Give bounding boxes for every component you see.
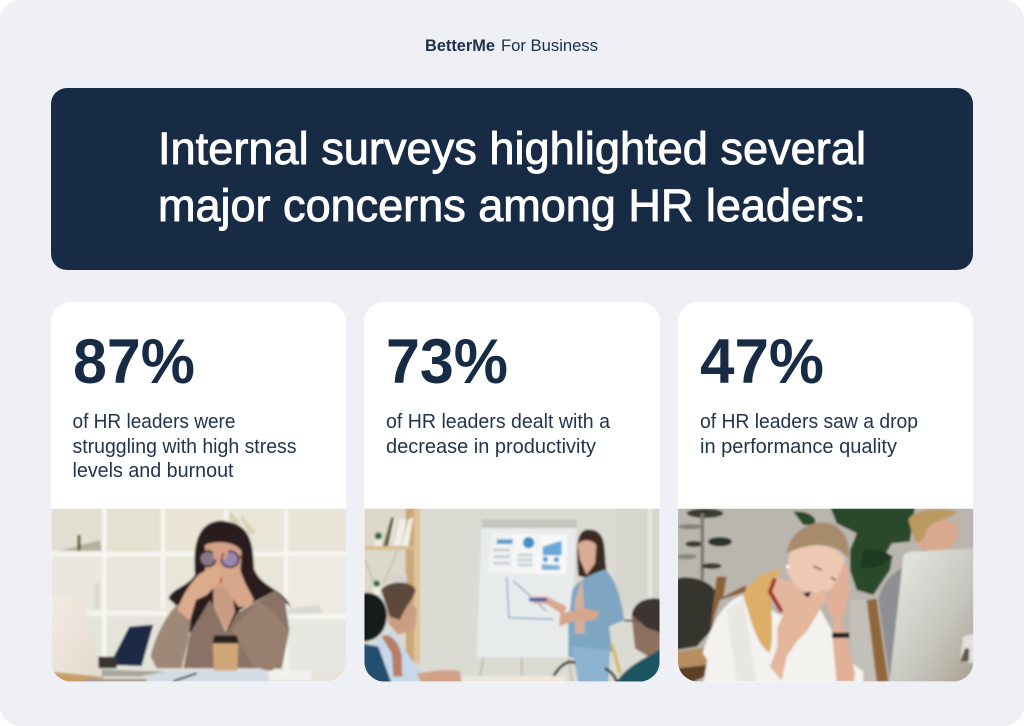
hair [168, 521, 291, 637]
hair top [787, 522, 849, 558]
wooden shelf [406, 507, 414, 664]
stat: 47%: 47% [700, 327, 824, 397]
man behind [878, 568, 902, 678]
logo: BetterMe For Business: For Business [501, 36, 598, 55]
monitor [889, 548, 975, 683]
chair [109, 625, 153, 666]
neck and shirt [213, 588, 235, 632]
ponytail [743, 569, 782, 653]
stat: 87%: 87% [73, 327, 195, 397]
logo: BetterMe For Business: BetterMe [425, 36, 495, 55]
logo: BetterMe For Business [425, 36, 598, 55]
books [98, 657, 117, 668]
chart papers [490, 534, 512, 572]
table [462, 676, 514, 682]
title: major concerns among HR leaders: [158, 180, 866, 231]
yawning hand and forearm [770, 588, 827, 681]
desk [51, 672, 348, 683]
face [787, 545, 844, 593]
panel: 87% stress and burnout [51, 302, 348, 684]
stat: 73%: 73% [386, 327, 508, 397]
neck [772, 576, 812, 614]
description: performance quality [700, 411, 918, 458]
title: Internal surveys highlighted several [158, 123, 866, 174]
plants [375, 538, 382, 546]
photo: stressed woman rubbing eyes at desk [51, 507, 348, 684]
title banner [51, 88, 973, 270]
books [383, 517, 413, 546]
shirt [703, 594, 863, 683]
flip chart [477, 521, 577, 657]
title [158, 123, 866, 231]
glasses [200, 551, 216, 566]
description: decrease in productivity: of HR leaders dealt with a [386, 411, 611, 433]
shelves are drawn light [51, 551, 348, 557]
presenter [577, 529, 607, 578]
description: stress and burnout: struggling with high stress [72, 436, 296, 458]
photo: yawning woman at computer [675, 507, 975, 683]
jacket body [183, 591, 289, 668]
panel: 73% decrease in productivity [362, 302, 662, 684]
right hand and forearm [826, 563, 855, 682]
drawn graph [507, 577, 553, 619]
center plant [793, 507, 915, 595]
photo: woman presenting at flip chart [362, 507, 662, 684]
description: performance quality: of HR leaders saw a drop [700, 411, 918, 433]
description: decrease in productivity [386, 411, 611, 458]
seated man left [372, 630, 423, 682]
face [205, 542, 242, 590]
forearm and hands [177, 564, 223, 621]
left plant [675, 509, 732, 650]
description: decrease in productivity: decrease in productivity [386, 436, 596, 458]
chair [710, 577, 746, 630]
seated woman left [362, 593, 387, 642]
description: stress and burnout: of HR leaders were [72, 411, 236, 433]
seated man right [615, 648, 662, 683]
description: stress and burnout [72, 411, 296, 482]
cup [213, 643, 238, 671]
description: stress and burnout: levels and burnout [72, 460, 234, 482]
sleeves [151, 604, 191, 668]
laptop [102, 669, 165, 677]
description: performance quality: in performance quality [700, 436, 897, 458]
panel: 47% drop in performance quality [675, 302, 975, 683]
